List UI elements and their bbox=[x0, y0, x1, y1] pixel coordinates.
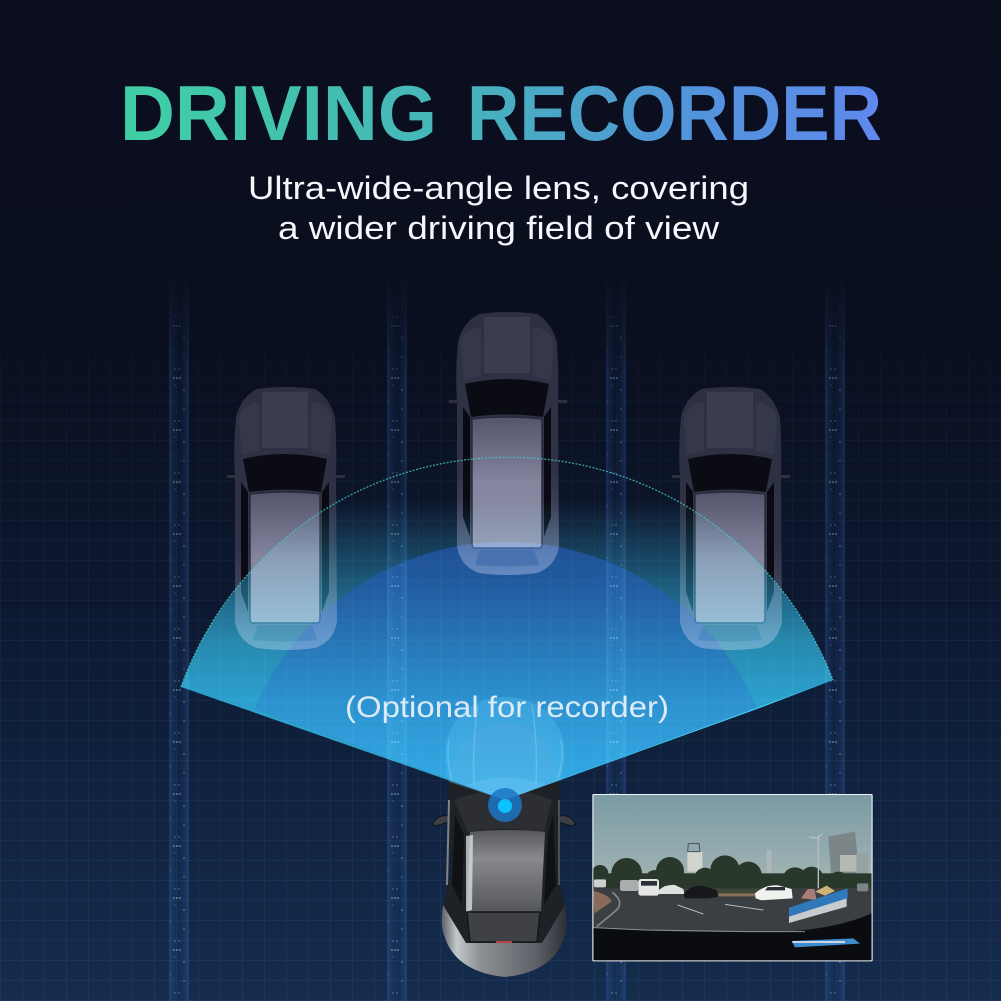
roof bbox=[467, 830, 545, 912]
left car bbox=[227, 387, 345, 650]
hood creases bbox=[448, 705, 562, 785]
windshield glow bbox=[465, 778, 545, 800]
right car bbox=[672, 387, 790, 650]
center car bbox=[449, 312, 567, 575]
photo frame bbox=[592, 794, 873, 961]
car hood through fan bbox=[445, 697, 565, 800]
roof highlight bbox=[466, 835, 473, 912]
rear window bbox=[467, 912, 540, 942]
road grid bbox=[0, 432, 1001, 1001]
lamp post bbox=[809, 834, 822, 888]
windshield bbox=[454, 790, 552, 832]
sky bbox=[593, 795, 872, 874]
outer sector ring bbox=[181, 457, 833, 709]
subtitle: a wider driving field of view bbox=[278, 210, 720, 246]
title bbox=[120, 69, 882, 157]
car body bbox=[443, 722, 566, 977]
dashboard bbox=[593, 913, 872, 962]
camera marker bbox=[488, 788, 522, 822]
brake light bbox=[496, 941, 512, 943]
side pillars bbox=[452, 815, 464, 905]
vehicles bbox=[620, 880, 638, 891]
lower body bbox=[442, 905, 566, 977]
street banner bbox=[789, 888, 848, 917]
title: RECORDER bbox=[467, 69, 882, 157]
subtitle: Ultra-wide-angle lens, covering bbox=[248, 170, 749, 206]
dashed arc bbox=[181, 457, 833, 687]
lane strips bbox=[169, 270, 845, 1001]
subtitle bbox=[248, 170, 749, 246]
dashcam photo bbox=[592, 794, 873, 962]
buildings bbox=[828, 832, 860, 873]
title: DRIVING bbox=[120, 69, 437, 157]
lower edge bands bbox=[181, 680, 833, 800]
dash reflection bbox=[792, 938, 860, 947]
road bbox=[593, 888, 872, 935]
field of view fan bbox=[181, 457, 833, 800]
tree line bbox=[592, 855, 872, 893]
inner sector bbox=[255, 542, 757, 800]
caption: (Optional for recorder) bbox=[345, 691, 669, 724]
main car bbox=[433, 722, 575, 977]
mirrors bbox=[433, 816, 575, 826]
